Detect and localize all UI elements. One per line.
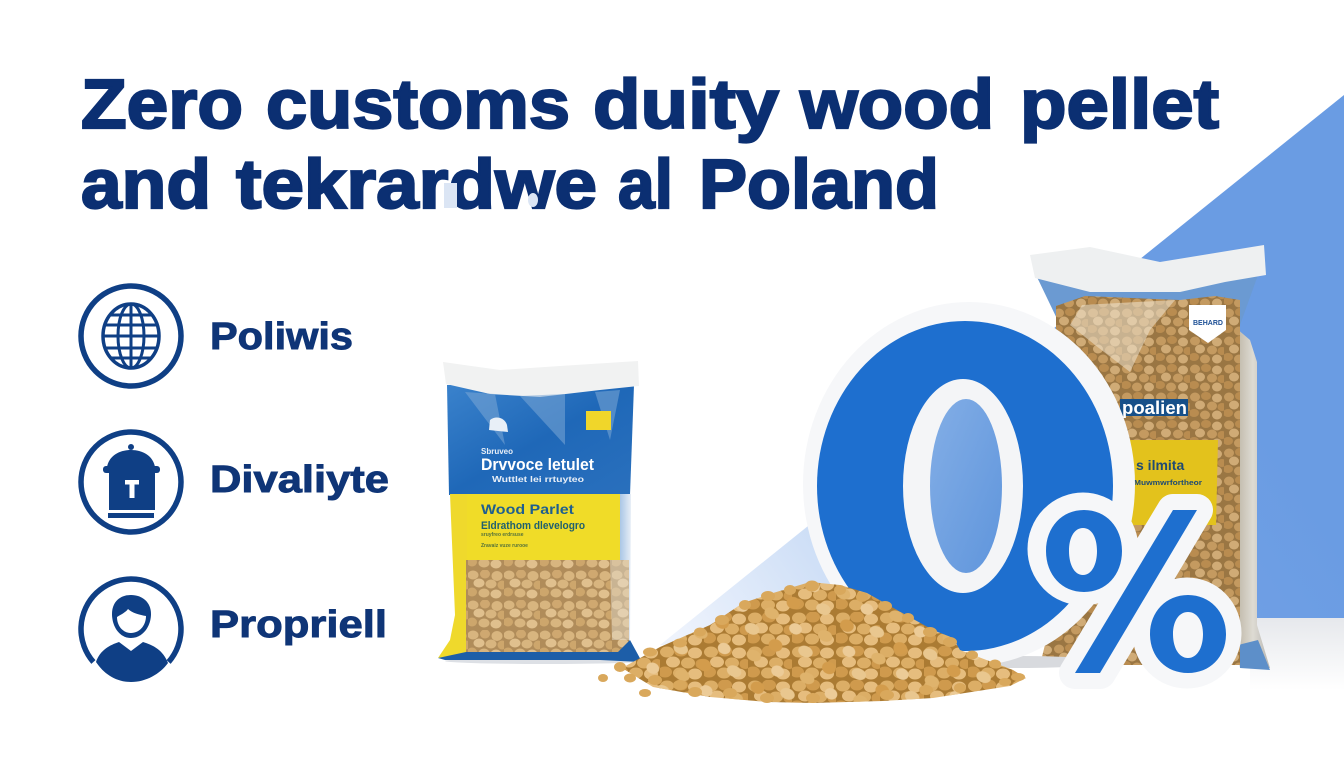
zero white outline [803, 302, 1135, 666]
percent blue slash [1075, 510, 1197, 673]
right pellet bag: Muwmwrfortheor [1134, 480, 1202, 487]
bag yellow band [466, 494, 620, 560]
bag gusset [1236, 328, 1270, 668]
bag white top [443, 361, 639, 397]
bag yellow label [1130, 440, 1218, 525]
title artefact patches [444, 183, 538, 208]
bag badge [586, 411, 611, 430]
bag corner [1238, 640, 1270, 670]
title [81, 65, 1219, 223]
bag pellets [1040, 296, 1240, 665]
zero inner rim [903, 379, 1023, 593]
right pellet bag [1030, 245, 1270, 670]
bag pellets window [466, 560, 629, 653]
icon: globe [81, 286, 181, 386]
title line 1: pellet [1020, 65, 1219, 143]
label: Divaliyte: Divaliyte [210, 459, 389, 501]
bag shadow [445, 658, 645, 664]
zero hole [930, 399, 1002, 573]
bag text: sruyfreo erdrsuse [481, 532, 524, 538]
right pellet bag: s ilmita [1136, 457, 1184, 473]
pile body [622, 582, 1026, 703]
icon: person [81, 579, 181, 682]
bag text [481, 447, 594, 549]
pile highlights [622, 582, 1026, 703]
title line 2: tekrardwe [236, 145, 597, 223]
bag bottom seam [438, 640, 642, 662]
label: Propriell: Propriell [210, 604, 387, 646]
title line 1: wood [799, 65, 994, 143]
bag white top [1030, 245, 1266, 292]
scattered pellets [598, 580, 1025, 703]
title line 1 [81, 65, 1219, 143]
zero blue face [817, 321, 1113, 651]
percent white outline [1028, 493, 1241, 688]
big zero [803, 302, 1135, 668]
label: Poliwis: Poliwis [210, 316, 353, 358]
bag right pale side [620, 494, 631, 650]
title line 2: and [81, 145, 211, 223]
left pellet bag [438, 361, 645, 664]
bag pale pellet highlights [1070, 300, 1175, 372]
bag yellow left side [438, 494, 467, 658]
bag highlights [465, 390, 620, 445]
bag logo [489, 418, 508, 432]
floor band [1250, 618, 1344, 690]
title line 2: Poland [699, 145, 939, 223]
bag dark label [1120, 399, 1188, 416]
title line 2 [81, 145, 939, 223]
zero floor shadow [935, 656, 1105, 668]
percent top circle [1046, 510, 1122, 592]
blue diagonal backdrop [660, 95, 1344, 645]
right pellet bag: BEHARD [1193, 320, 1223, 327]
percent sign [1028, 493, 1241, 688]
bag badge [1189, 305, 1226, 343]
pellet pile [598, 580, 1026, 703]
percent bottom circle [1150, 595, 1226, 673]
bag text: Sbruveo [481, 447, 513, 456]
bag text: Drvvoce letulet [481, 455, 594, 474]
title line 1: Zero [81, 65, 243, 143]
feature list [81, 286, 389, 682]
icon: customs container [81, 432, 181, 532]
bag text: Wuttlet lei rrtuyteo [492, 475, 584, 484]
title line 1: customs [266, 65, 570, 143]
bag text: Wood Parlet [481, 501, 574, 517]
title line 1: duity [593, 65, 779, 143]
bag text: Eldrathom dlevelogro [481, 520, 585, 532]
title line 2: al [618, 145, 673, 223]
bag blue top [1036, 275, 1258, 325]
bag text: Zravaiz vuze rurooe [481, 543, 528, 549]
right pellet bag: poalien [1122, 398, 1187, 418]
bag blue body [447, 385, 634, 495]
